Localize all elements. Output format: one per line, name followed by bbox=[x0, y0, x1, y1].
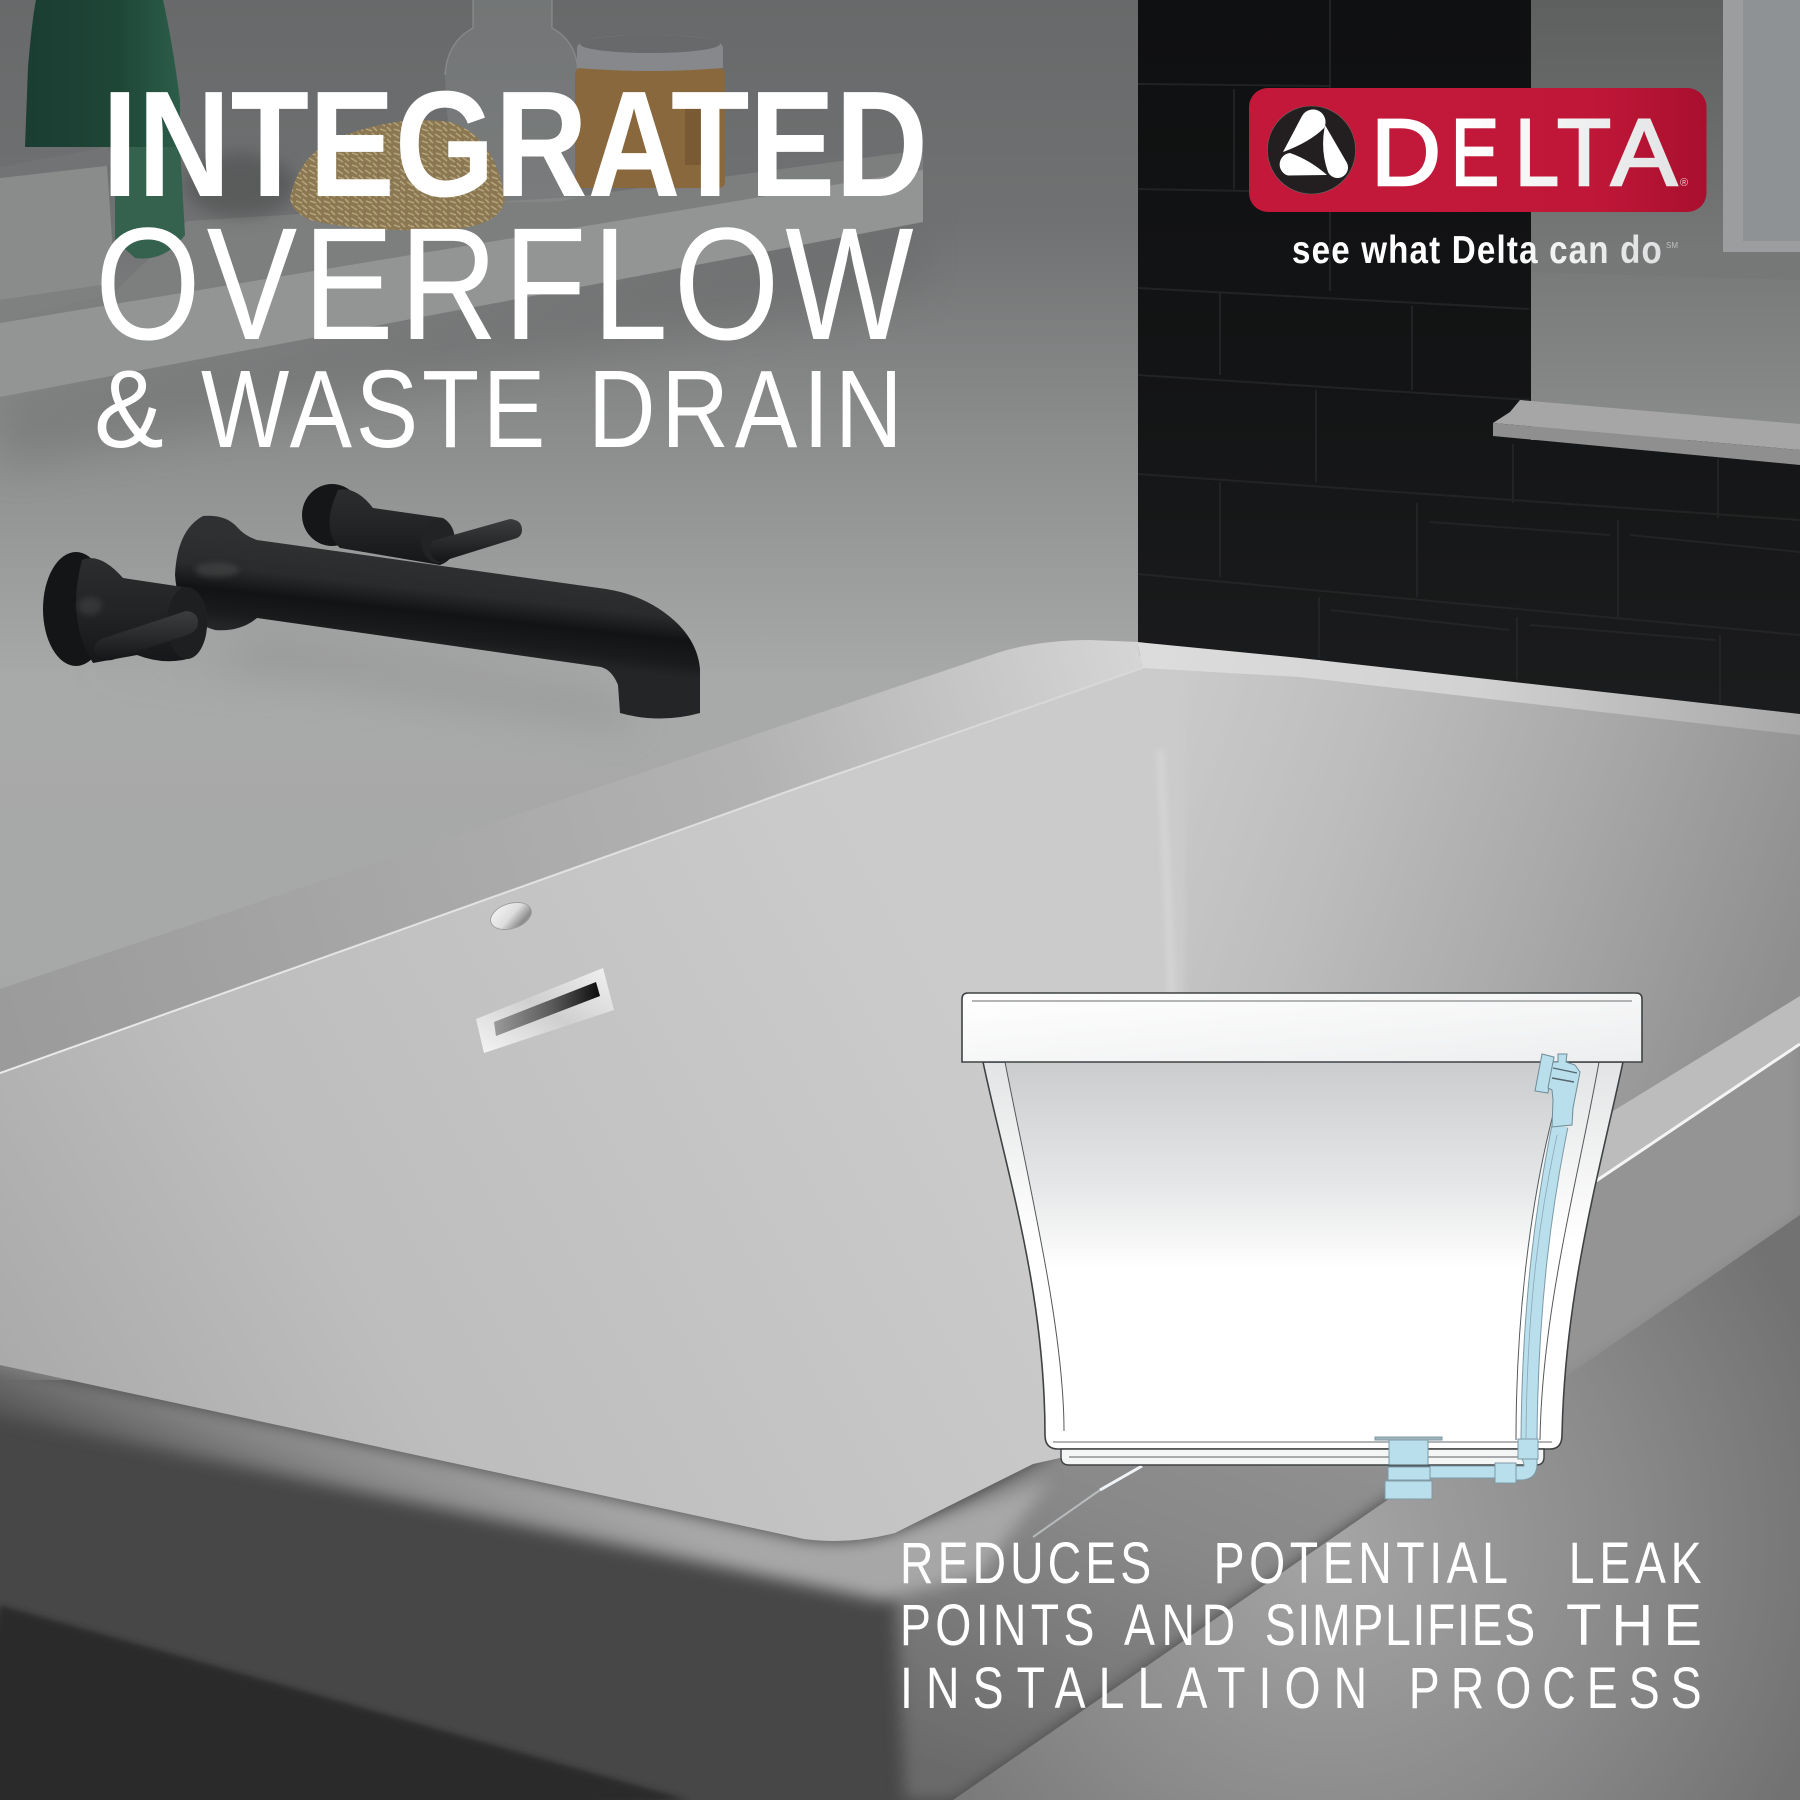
DELTA wordmark: E bbox=[1451, 100, 1499, 206]
front face of tub bbox=[0, 1380, 1400, 1800]
title line: & WASTE DRAIN: & bbox=[94, 348, 164, 471]
title line: INTEGRATED: INTEGRATED bbox=[102, 59, 928, 228]
right rim surface bbox=[860, 996, 1800, 1800]
background: shelf with bottle, jars and sponge bbox=[0, 0, 923, 470]
caption line 1: REDUCES bbox=[900, 1531, 1151, 1596]
tub body outline bbox=[983, 1062, 1623, 1449]
tub back wall bbox=[1185, 655, 1800, 1302]
outer face lower right bbox=[953, 1215, 1800, 1800]
DELTA wordmark: D bbox=[1371, 100, 1441, 206]
triangle emblem bbox=[1268, 106, 1356, 194]
title line: OVERFLOW: OVERFLOW bbox=[95, 196, 914, 373]
title line: & WASTE DRAIN: WASTE bbox=[201, 348, 545, 471]
title line: & WASTE DRAIN bbox=[94, 348, 903, 471]
green bottle bbox=[25, 0, 185, 259]
rim top back bbox=[1137, 642, 1800, 735]
dark floor shadow bbox=[0, 1605, 689, 1800]
window sill bbox=[1493, 400, 1800, 465]
DELTA wordmark bbox=[1371, 100, 1678, 206]
spout bbox=[175, 516, 700, 718]
window frame bbox=[1531, 0, 1800, 280]
soft corner light line bbox=[1160, 750, 1172, 1000]
DELTA wordmark: L bbox=[1515, 100, 1559, 206]
caption bbox=[900, 1531, 1702, 1721]
bathtub bbox=[0, 640, 1800, 1800]
interior contour lines bbox=[1005, 1062, 1599, 1440]
Delta logo bbox=[1249, 88, 1706, 212]
background: right wall, window and sill bbox=[1493, 0, 1800, 465]
clear glass jar bbox=[445, 0, 578, 202]
caption line 1 bbox=[900, 1531, 1702, 1596]
tile grout lines bbox=[1138, 0, 1800, 704]
title bbox=[94, 59, 928, 471]
DELTA wordmark: A bbox=[1611, 100, 1678, 206]
faucet wall shadow bbox=[60, 640, 640, 730]
tagline: see what Delta can do bbox=[1292, 227, 1662, 272]
front rim highlight streak bbox=[1033, 1466, 1142, 1537]
right rim highlight bbox=[1593, 1044, 1800, 1183]
spout soft highlight bbox=[195, 563, 239, 577]
shelf surfaces bbox=[0, 147, 923, 470]
tub rim bbox=[962, 993, 1642, 1062]
registered mark: ® bbox=[1680, 177, 1688, 189]
tub interior panel bbox=[1005, 1062, 1560, 1442]
rim highlight line bbox=[0, 668, 1143, 1073]
service mark: SM bbox=[1666, 241, 1678, 250]
DELTA wordmark: T bbox=[1557, 100, 1611, 206]
rear handle bbox=[302, 484, 522, 565]
amber jar bbox=[575, 35, 725, 188]
drain slot plate bbox=[476, 968, 614, 1053]
title line: & WASTE DRAIN: DRAIN bbox=[588, 348, 903, 471]
caption line 3: PROCESS bbox=[1409, 1656, 1702, 1721]
caption line 2 bbox=[900, 1593, 1702, 1658]
overflow fitting bbox=[1535, 1054, 1580, 1127]
sponge bbox=[290, 120, 505, 230]
caption line 3: INSTALLATION bbox=[900, 1656, 1367, 1721]
overflow cover bbox=[487, 898, 535, 934]
caption line 2: SIMPLIFIES bbox=[1265, 1593, 1535, 1658]
front handle bbox=[43, 552, 207, 666]
background: black subway tile wall bbox=[1138, 0, 1800, 740]
red badge bbox=[1249, 88, 1706, 212]
tub basin floor bbox=[0, 655, 1320, 1541]
caption line 1: POTENTIAL bbox=[1214, 1531, 1508, 1596]
background: bathroom wall bbox=[0, 0, 1140, 1100]
caption line 2: AND bbox=[1124, 1593, 1235, 1658]
right rim band bbox=[1593, 996, 1800, 1183]
rim top left bbox=[0, 640, 1143, 1073]
tub bottom ledge bbox=[1053, 1442, 1552, 1465]
caption line 2: THE bbox=[1566, 1593, 1702, 1658]
back wall right side sharp fill bbox=[1300, 668, 1800, 1302]
drain, trap and elbow assembly bbox=[1375, 1437, 1538, 1499]
caption line 1: LEAK bbox=[1569, 1531, 1702, 1596]
blue overflow tube bbox=[1526, 1126, 1560, 1440]
wall-mounted matte black tub faucet bbox=[43, 484, 700, 730]
caption line 2: POINTS bbox=[900, 1593, 1094, 1658]
tub cross-section diagram bbox=[962, 993, 1642, 1499]
caption line 3 bbox=[900, 1656, 1702, 1721]
near rim strip bbox=[0, 1360, 1050, 1600]
